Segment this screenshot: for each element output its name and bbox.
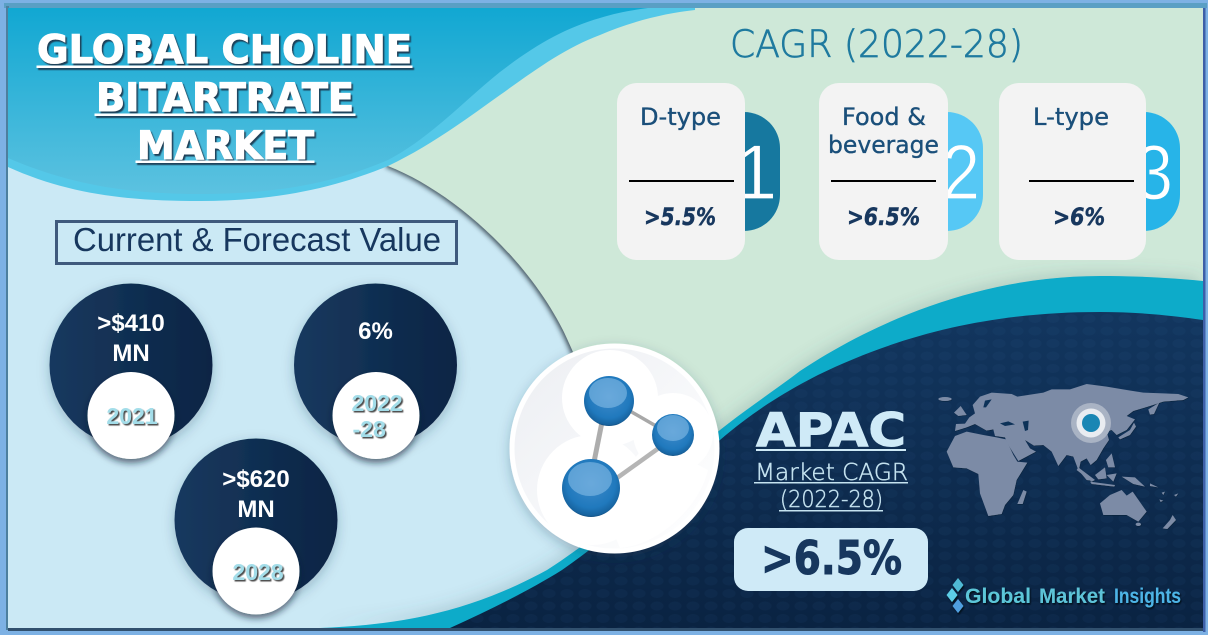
logo wordmark: Global bbox=[965, 585, 1031, 608]
Iceland bbox=[938, 397, 952, 401]
heading: current and forecast value: Current & Forecast Value bbox=[73, 221, 441, 258]
APAC subheading bbox=[754, 460, 908, 513]
card: L-type: 3 bbox=[1135, 128, 1173, 216]
stat circle: 2022-28 growth bbox=[294, 284, 457, 459]
Sumatra bbox=[1077, 467, 1095, 482]
logo: Global Market Insights bbox=[946, 578, 1181, 613]
card: Food and beverage: Food & bbox=[842, 103, 926, 131]
stat circle: 2021 value: 2021 bbox=[106, 403, 158, 429]
title: GLOBAL CHOLINE bbox=[37, 28, 412, 73]
stat circle: 2028 value: MN bbox=[237, 496, 275, 523]
logo wordmark: Market bbox=[1039, 585, 1105, 608]
panel: CAGR green background bbox=[383, 8, 1203, 432]
stat circle: 2028 value: 2028 bbox=[232, 559, 284, 585]
title bbox=[37, 28, 412, 169]
panel: current and forecast value background bbox=[8, 166, 580, 628]
title: BITARTRATE bbox=[96, 76, 354, 121]
Kamchatka bbox=[1148, 403, 1159, 415]
map marker: APAC bbox=[1071, 403, 1111, 443]
stat circle: 2022-28 growth: 6% bbox=[358, 318, 393, 345]
stat circle: 2021 value bbox=[50, 284, 212, 459]
Africa bbox=[947, 432, 1027, 516]
logo diamonds bbox=[946, 578, 964, 613]
stat circle: 2028 value bbox=[174, 438, 338, 614]
Sulawesi bbox=[1107, 473, 1117, 482]
Madagascar bbox=[1017, 490, 1027, 504]
Philippines bbox=[1106, 453, 1115, 467]
card: L-type bbox=[999, 83, 1180, 260]
card: Food and beverage bbox=[819, 83, 983, 260]
logo wordmark: Insights bbox=[1114, 585, 1181, 608]
card: L-type: L-type bbox=[1033, 103, 1109, 131]
card: D-type: 1 bbox=[734, 128, 777, 216]
Tasmania bbox=[1136, 523, 1141, 526]
New Guinea bbox=[1122, 477, 1145, 487]
APAC subheading: (2022-28) bbox=[780, 487, 883, 513]
New Zealand bbox=[1163, 515, 1176, 529]
icon: molecule bbox=[510, 344, 720, 554]
logo wordmark bbox=[965, 585, 1181, 608]
stat circle: 2028 value: >$620 bbox=[222, 466, 290, 493]
APAC value callout: >6.5% bbox=[761, 531, 902, 585]
title: MARKET bbox=[137, 124, 314, 169]
inland seas bbox=[983, 399, 1029, 431]
Borneo bbox=[1095, 467, 1107, 479]
card: D-type: >5.5% bbox=[644, 203, 716, 231]
Australia bbox=[1100, 490, 1147, 522]
panel: top wave light edge bbox=[8, 8, 695, 201]
card: Food and beverage: beverage bbox=[828, 131, 939, 159]
card: Food and beverage: >6.5% bbox=[847, 203, 920, 231]
card: D-type bbox=[617, 83, 780, 260]
stat circle: 2022-28 growth: 2022 bbox=[352, 390, 403, 416]
APAC subheading: Market CAGR bbox=[755, 460, 908, 486]
stat circle: 2022-28 growth: -28 bbox=[352, 416, 386, 442]
panel: teal wave bbox=[320, 276, 1203, 628]
card: D-type: D-type bbox=[640, 103, 721, 131]
Britain bbox=[954, 406, 967, 416]
APAC heading: APAC bbox=[756, 403, 906, 457]
Eurasia bbox=[955, 384, 1188, 481]
Pacific islands bbox=[1150, 483, 1178, 502]
Japan bbox=[1118, 423, 1136, 439]
stat circle: 2021 value: >$410 bbox=[97, 310, 165, 337]
stat circle: 2021 value: MN bbox=[112, 340, 150, 367]
dot pattern bbox=[450, 312, 1203, 628]
panel: top wave bbox=[8, 5, 670, 194]
Java bbox=[1090, 482, 1115, 487]
heading: CAGR: CAGR (2022-28) bbox=[730, 23, 1023, 66]
panel: APAC dark background bbox=[450, 312, 1203, 628]
world map bbox=[938, 384, 1188, 529]
card: Food and beverage: 2 bbox=[942, 128, 980, 216]
card: L-type: >6% bbox=[1053, 203, 1105, 231]
